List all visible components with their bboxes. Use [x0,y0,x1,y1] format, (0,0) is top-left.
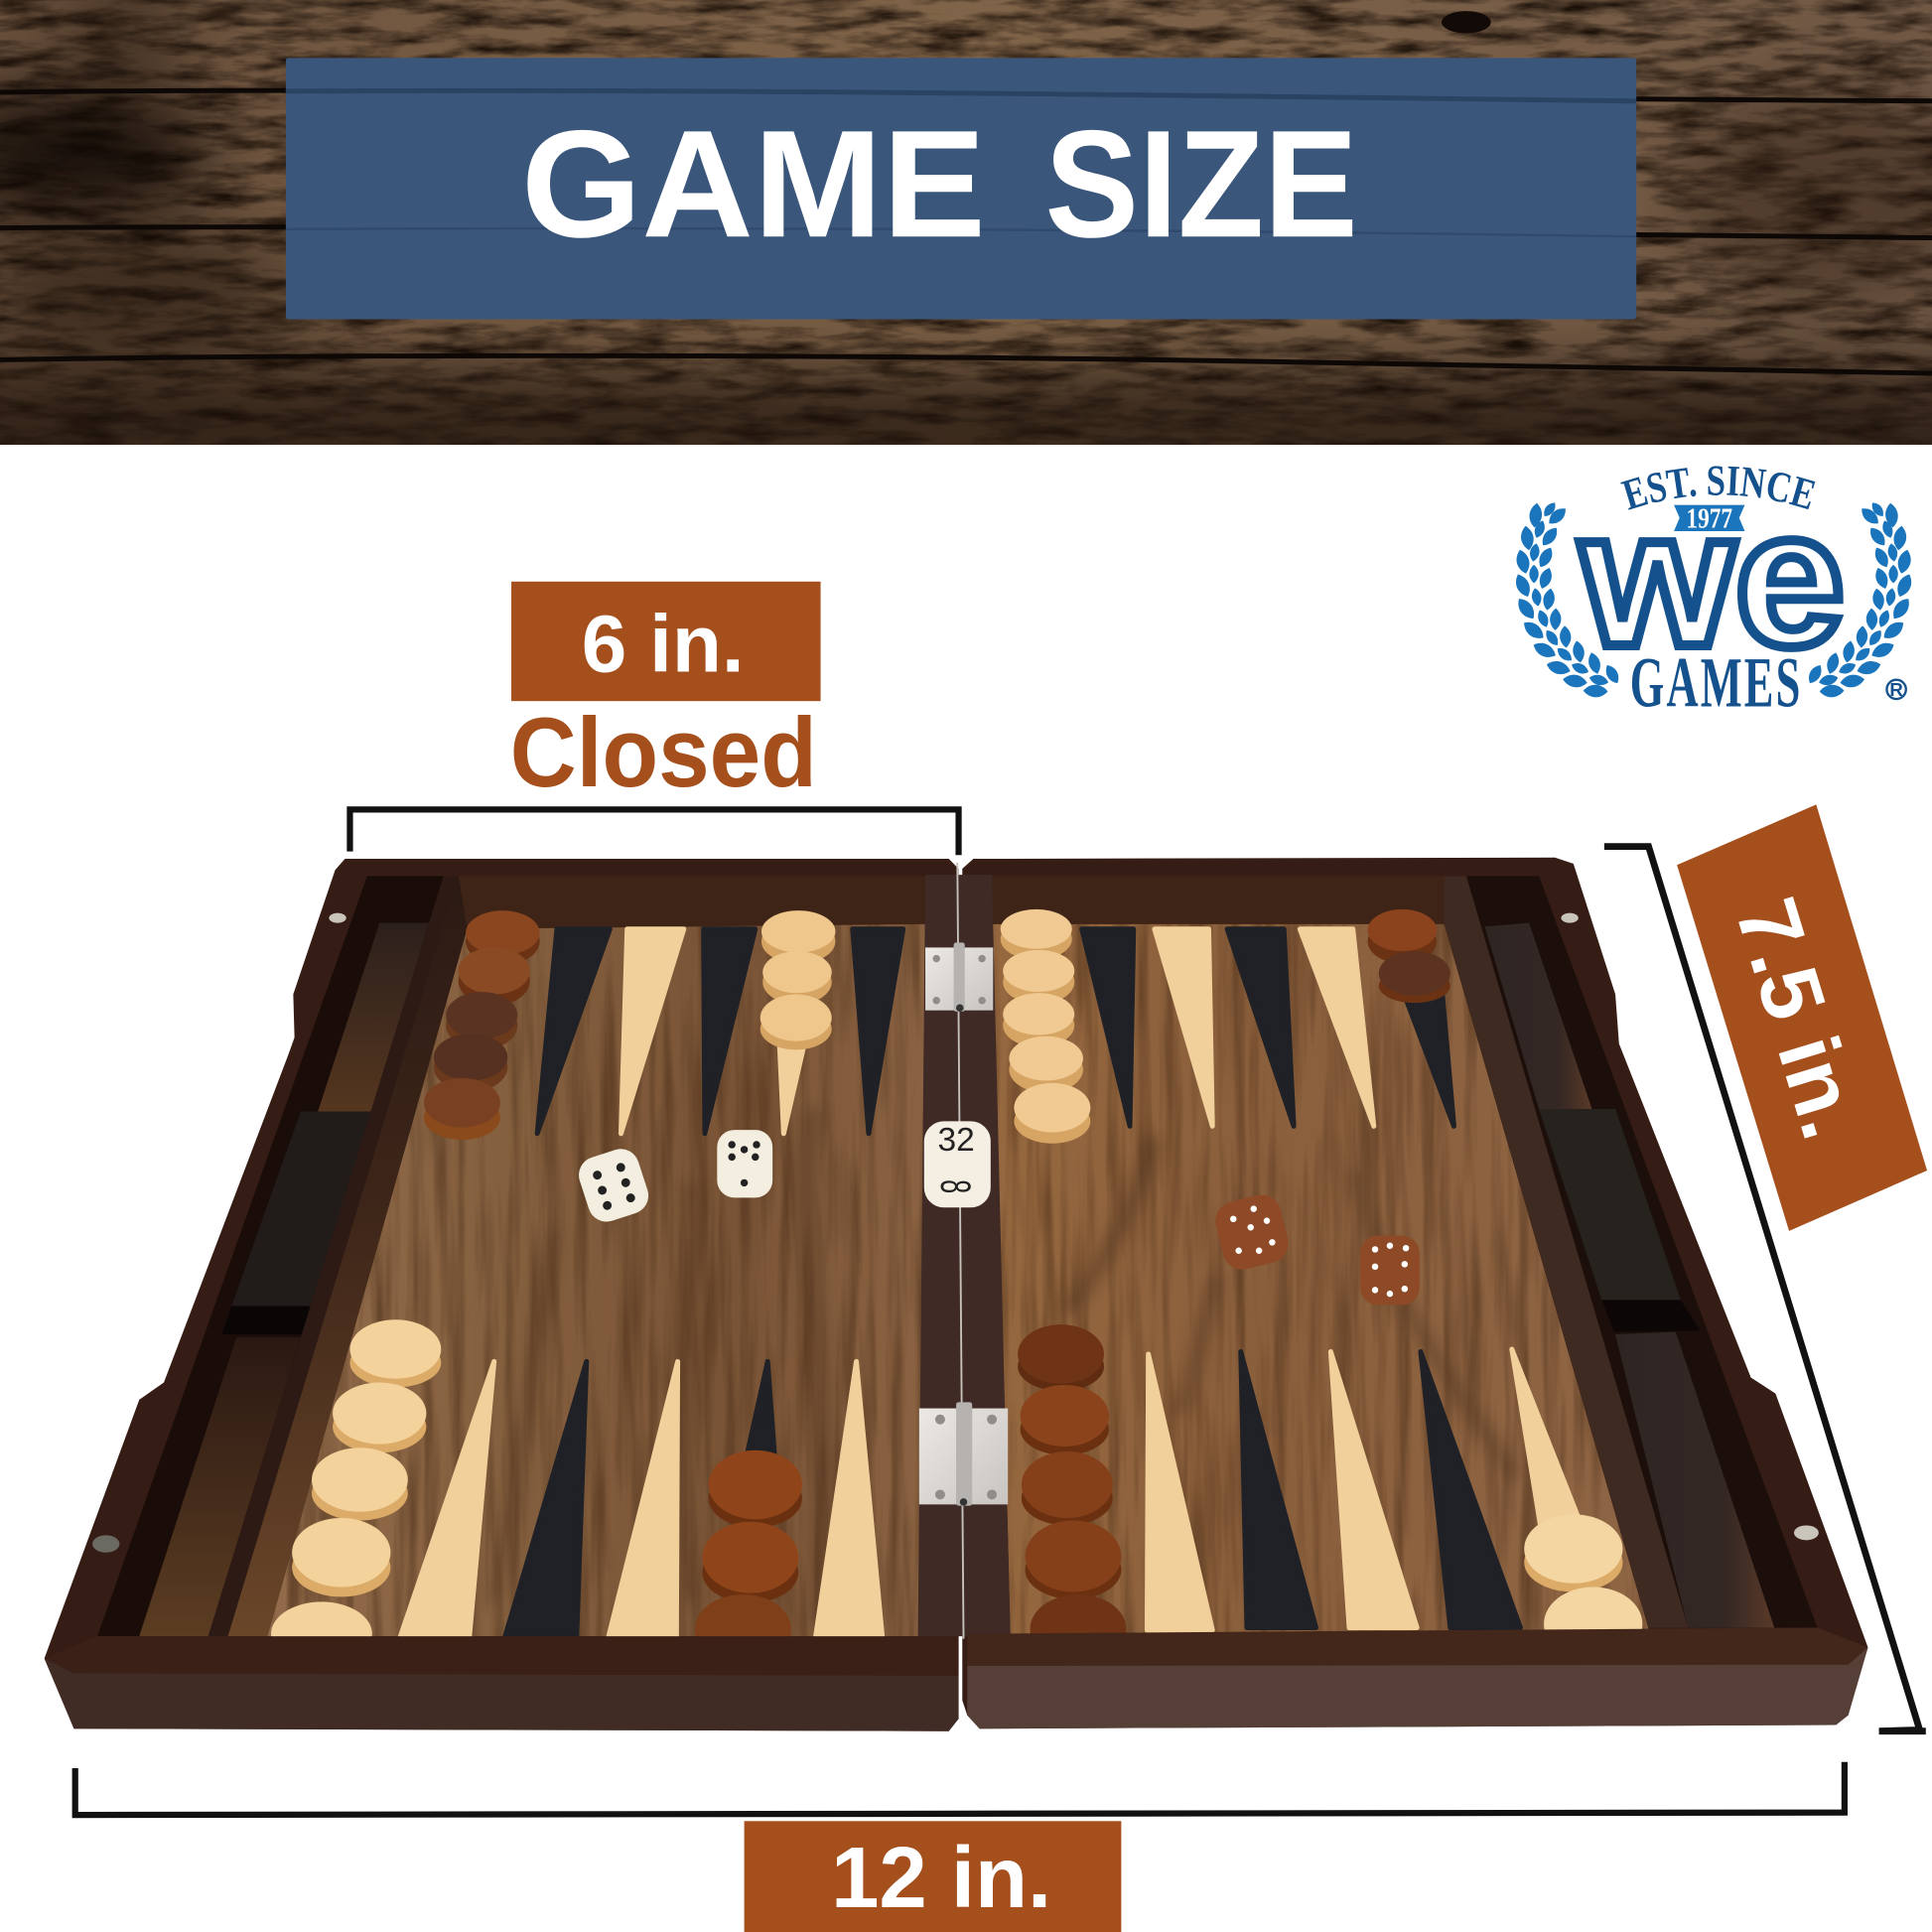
doubling cube: 32 [937,1122,975,1159]
title banner [286,58,1636,319]
left tray floor upper [318,923,429,1111]
registered mark [1886,679,1906,700]
top hinge [925,942,993,1012]
left half frame [45,859,959,1731]
year ribbon: 1977 [1686,504,1732,535]
dimension: 12 in. label: 12 in. [831,1830,1051,1926]
icon: left laurel wreath [1512,500,1622,698]
top left dark checkers [424,910,540,1140]
right divider wall [1445,876,1688,1627]
left front rim [45,1636,959,1676]
right bottom points [1147,1349,1601,1630]
dimension: 7.5 in. label: 7.5 in. [1717,888,1880,1150]
doubling cube: 8 [931,1179,978,1193]
dimension: 6 in. closed [349,582,959,855]
bottom left light checkers [271,1319,441,1666]
magnets [92,913,1819,1553]
right top wall [992,876,1445,924]
bottom right dark checkers [1018,1324,1126,1663]
closed label: Closed [510,698,817,808]
dimension: 7.5 in. bracket [1604,847,1926,1731]
centre hinge bar [918,875,1011,1636]
title text: SIZE [1044,98,1358,269]
right top points [1082,929,1453,1126]
right half frame [962,858,1867,1728]
right storage tray [1466,876,1818,1627]
left storage tray [97,876,444,1636]
dimension: 6 in. closed: 6 in. [582,599,745,689]
right leather strap [1539,1109,1681,1300]
top right light checkers [1001,909,1090,1144]
dimension: 12 in. label [745,1821,1121,1932]
left leather strap [231,1111,372,1307]
board [45,858,1867,1731]
dimension: 7.5 in. label [1677,804,1927,1231]
left field figure [492,1109,824,1626]
header wood background [0,0,1932,492]
doubling cube [924,1121,991,1207]
right tray floor lower [1615,1332,1774,1627]
icon: right laurel wreath [1805,500,1915,698]
title text: GAME [521,98,986,269]
left playfield [267,924,926,1636]
bottom left dark checkers [695,1450,802,1663]
bottom right light checkers [1524,1514,1642,1661]
centre seam [957,863,964,1639]
white die right [717,1130,772,1197]
est since: EST. SINCE [1620,466,1815,510]
bottom hinge [919,1402,1008,1506]
logo arc path [1628,495,1809,510]
right playfield [992,924,1649,1634]
dimension: 12 in. bracket [75,1762,1845,1815]
brown die left [1211,1190,1293,1274]
left front side [45,1658,959,1731]
right field figure [1068,1139,1516,1478]
registered mark: R [1889,679,1903,700]
logo: WE Games [1516,466,1912,722]
left tray floor lower [139,1337,301,1636]
left bottom points [400,1361,883,1636]
top left light checkers [760,910,835,1049]
we wordmark: we [1580,469,1845,687]
right front rim [967,1627,1867,1666]
left divider wall [208,876,467,1636]
right tray floor upper [1484,923,1591,1109]
closed bracket [349,809,959,855]
left top wall [459,876,925,929]
right front side [967,1647,1867,1728]
white die left [574,1144,653,1226]
left top points [537,929,903,1134]
top right dark checkers [1368,909,1450,1003]
brown die right [1360,1236,1420,1305]
games text: GAMES [1630,643,1800,722]
